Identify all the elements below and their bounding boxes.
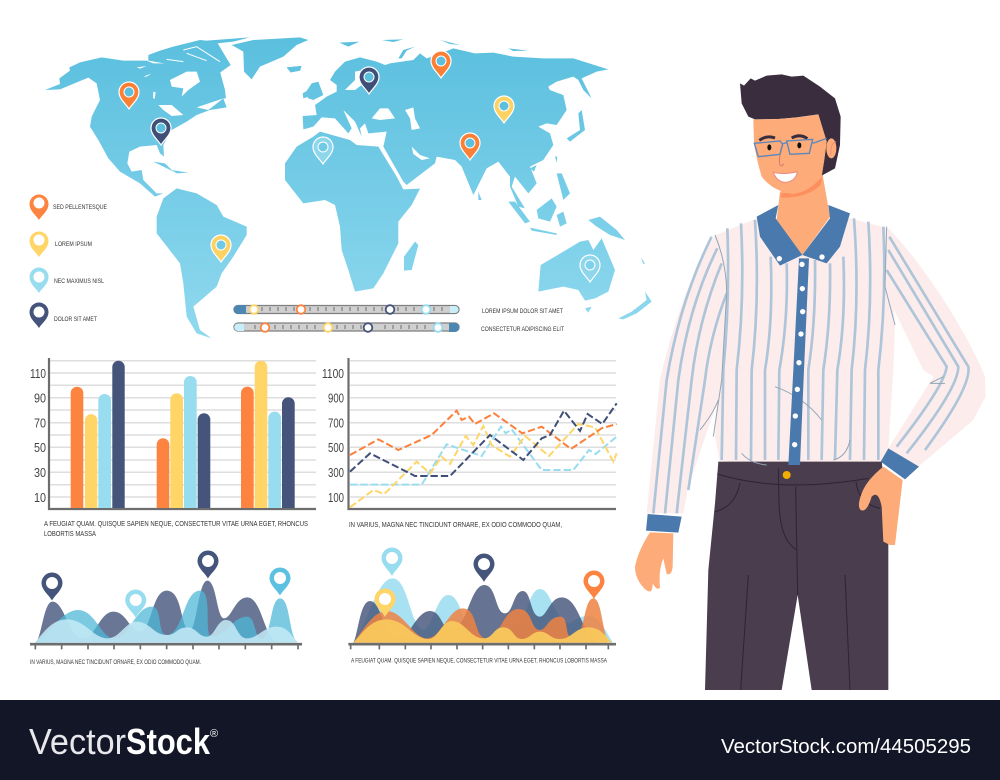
bar chart caption [44,519,308,538]
chart pin: orange [584,570,604,599]
placket buttons [792,262,805,447]
shirt right sleeve [886,228,986,467]
line chart axis labels: 900 [328,390,344,406]
slider label: top: LOREM IPSUM DOLOR SIT AMET [482,308,563,315]
line chart axis labels: 300 [328,465,344,480]
character: man in striped shirt [635,74,986,690]
pin: russia orange [431,51,451,78]
chart pin: blue right [270,568,290,596]
pin: africa outline [313,137,333,164]
shirt folds [700,227,945,465]
chart pin: navy [474,554,494,582]
line chart axis labels [322,366,344,505]
pin: north america orange [119,82,139,109]
bar chart caption: A FEUGIAT QUAM. QUISQUE SAPIEN NEQUE, CONSECTETUR VITAE URNA EGET, RHONCUS [44,519,308,528]
line chart axis labels: 100 [328,490,344,505]
left cuff and hand [635,514,682,591]
bars: group one [71,361,125,508]
footer band [0,700,1000,780]
bars: group two [157,376,210,508]
neck and collar [757,175,850,266]
bar chart [30,358,316,509]
bar chart axis labels: 70 [34,416,46,430]
legend item: sed pellentesque: SED PELLENTESQUE [53,204,108,211]
shirt left sleeve [647,235,728,513]
shirt [647,218,986,513]
slider: bottom [234,323,460,332]
glasses [754,138,827,157]
pin: australia outline [580,255,600,282]
eyes [767,144,771,150]
shirt placket [788,258,809,465]
footer logo: Stock [126,721,211,762]
bar chart axis labels: 50 [34,440,46,455]
panel: world map [45,37,652,338]
line chart axis labels: 700 [328,416,344,430]
bar chart axis labels: 10 [34,490,46,505]
pin: india orange [460,133,480,160]
slider: top [234,305,459,314]
pin: south america yellow [211,235,231,262]
bar chart caption: LOBORTIS MASSA [44,529,96,538]
legend: pins [30,194,108,328]
area layers blue [30,581,302,649]
ear [826,138,836,158]
nose [779,146,783,166]
hair [740,74,841,176]
shirt torso [715,218,895,462]
pin: north america navy [151,118,171,145]
bar chart axis labels: 90 [34,390,46,406]
bar chart axis labels: 30 [34,465,46,480]
legend item: nec maximus nisl: NEC MAXIMUS NISL [54,278,104,285]
chart pin: navy left [42,572,62,600]
face [753,114,827,194]
footer logo: Vector [29,721,126,762]
bars: group three [241,361,295,508]
trousers [705,460,888,690]
line chart axis labels: 1100 [322,366,344,381]
slider label: bottom: CONSECTETUR ADIPISCING ELIT [481,326,564,333]
chart pin: yellow [374,588,396,617]
area layers orange [348,578,616,649]
dashed lines [350,403,617,507]
area chart blue caption: IN VARIUS, MAGNA NEC TINCIDUNT ORNARE, EX ODIO COMMODO QUAM. [30,659,201,666]
eyebrows [759,136,807,140]
shirt stripes [653,218,969,513]
line chart caption: IN VARIUS, MAGNA NEC TINCIDUNT ORNARE, EX ODIO COMMODO QUAM, [349,520,562,529]
pin: asia yellow [494,96,514,123]
map: eurasia and africa [285,39,608,292]
line chart axis labels: 500 [328,440,344,455]
legend item: dolor sit amet: DOLOR SIT AMET [54,316,97,323]
chart pin: navy top [198,550,218,578]
footer logo: ® [210,728,218,740]
smile [773,172,797,182]
head [740,74,841,194]
right cuff and hand [859,448,919,545]
map: south america [157,188,247,338]
footer image id: VectorStock.com/44505295 [721,736,971,758]
area chart orange caption: A FEUGIAT QUAM. QUISQUE SAPIEN NEQUE, CONSECTETUR VITAE URNA EGET, RHONCUS LOBORTIS MASSA [351,658,607,664]
pin: scandinavia navy [359,67,379,94]
chart pin: light top [382,548,402,576]
chart pin: light centre [125,590,146,618]
map: islands and australia [404,110,652,319]
bar chart axis labels: 110 [30,366,46,381]
footer logo [29,721,218,762]
area chart: blue [30,550,302,649]
legend item: lorem ipsum: LOREM IPSUM [55,241,92,248]
map: north america and greenland [45,37,308,197]
bar chart axis labels [30,366,46,505]
line chart [322,358,617,509]
area chart: orange [348,548,616,649]
